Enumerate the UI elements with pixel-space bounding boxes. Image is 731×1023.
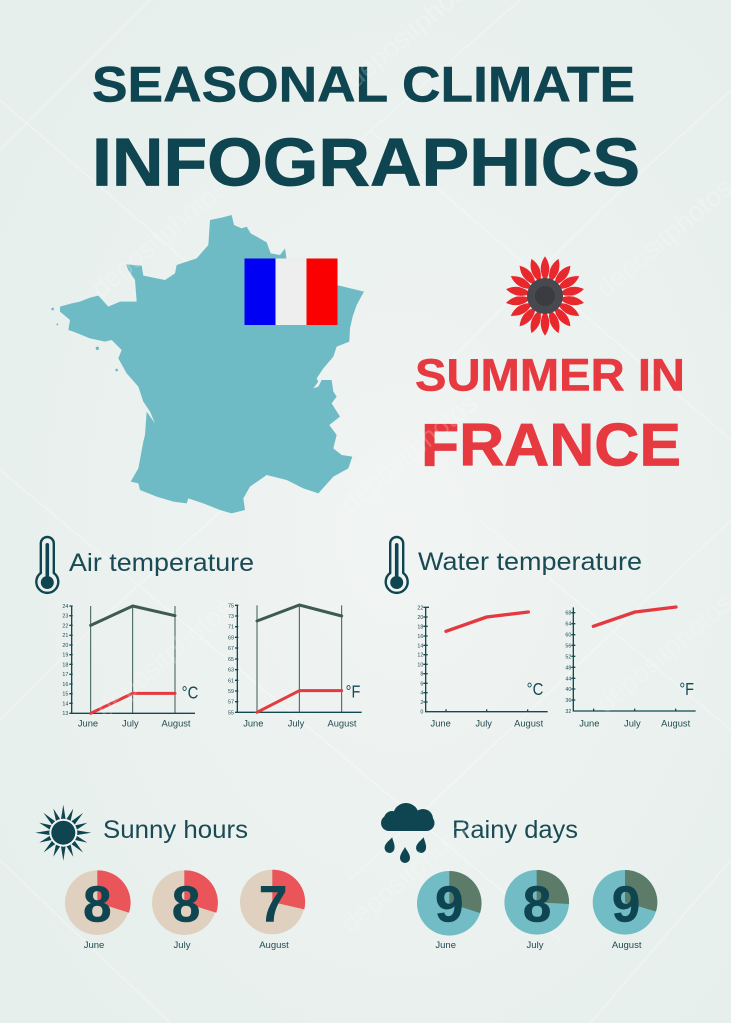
chart: air temperature Celsius: 22: [62, 623, 68, 629]
pie: rainy days July: [504, 870, 569, 951]
map of France: [51, 215, 364, 513]
chart: water temperature Celsius: 2: [420, 700, 423, 706]
icon: sunflower: [505, 256, 585, 336]
chart: air temperature Celsius: 20: [62, 643, 68, 649]
chart: air temperature Fahrenheit: 71: [228, 625, 234, 631]
chart: water temperature Celsius: 8: [420, 672, 423, 678]
watermark: depositphotos: [335, 388, 483, 519]
chart: water temperature Celsius: August: [514, 719, 544, 729]
chart: air temperature Celsius: 16: [62, 682, 68, 688]
icon: air thermometer: [36, 537, 58, 593]
chart: air temperature Celsius: 13: [62, 711, 68, 717]
chart: water temperature Celsius: [417, 605, 548, 729]
chart: air temperature Celsius: [62, 604, 198, 729]
pie: rainy days July: July: [527, 940, 544, 951]
chart: air temperature Celsius: 17: [62, 672, 68, 678]
pie: sunny hours August: [240, 870, 305, 951]
chart: air temperature Celsius: 15: [62, 692, 68, 698]
pie: rainy days June: [417, 871, 482, 951]
chart: water temperature Fahrenheit: 40: [565, 687, 571, 693]
chart: air temperature Fahrenheit: 73: [228, 614, 234, 620]
chart: air temperature Fahrenheit: [228, 603, 362, 729]
chart: water temperature Fahrenheit: 32: [565, 709, 571, 715]
chart: water temperature Celsius: July: [475, 719, 492, 729]
icon: water thermometer: [386, 537, 408, 593]
chart: water temperature Celsius: June: [431, 719, 451, 729]
watermark: depositphotos: [335, 808, 483, 939]
watermark: depositphotos: [85, 173, 233, 304]
pie: sunny hours July: July: [174, 940, 191, 951]
pie: rainy days June: June: [435, 940, 456, 951]
heading: sunny hours: Sunny hours: [103, 816, 248, 844]
chart: air temperature Fahrenheit: 69: [228, 635, 234, 641]
chart: water temperature Fahrenheit: °F: [679, 679, 694, 699]
chart: water temperature Fahrenheit: July: [624, 719, 641, 729]
chart: water temperature Celsius: 4: [420, 691, 423, 697]
chart: air temperature Fahrenheit: 63: [228, 668, 234, 674]
chart: water temperature Celsius: 6: [420, 681, 423, 687]
icon: rain cloud: [381, 803, 434, 863]
subtitle: summer in France: SUMMER IN: [415, 350, 685, 400]
title: INFOGRAPHICS: [92, 124, 640, 200]
pie: sunny hours August: 7: [259, 876, 287, 932]
chart: air temperature Fahrenheit: June: [243, 719, 263, 729]
chart: air temperature Celsius: 14: [62, 701, 68, 707]
chart: air temperature Fahrenheit: August: [327, 719, 357, 729]
chart: air temperature Fahrenheit: 57: [228, 700, 234, 706]
chart: air temperature Fahrenheit: 55: [228, 710, 234, 716]
chart: air temperature Fahrenheit: 65: [228, 657, 234, 663]
flag of France: [244, 258, 338, 325]
title: SEASONAL CLIMATE: [92, 56, 635, 112]
chart: water temperature Fahrenheit: 44: [565, 676, 571, 682]
chart: air temperature Fahrenheit: 67: [228, 646, 234, 652]
heading: air temperature: Air temperature: [69, 549, 254, 577]
pie: sunny hours July: 8: [172, 876, 200, 932]
subtitle: summer in France: [415, 350, 685, 478]
chart: water temperature Fahrenheit: 52: [565, 654, 571, 660]
chart: water temperature Fahrenheit: 68: [565, 611, 571, 617]
chart: air temperature Fahrenheit: °F: [346, 682, 360, 702]
chart: water temperature Fahrenheit: 60: [565, 633, 571, 639]
heading: water temperature: Water temperature: [418, 548, 642, 576]
pie: rainy days August: 9: [612, 876, 640, 932]
chart: water temperature Celsius: °C: [527, 679, 543, 699]
chart: water temperature Fahrenheit: 36: [565, 698, 571, 704]
chart: air temperature Fahrenheit: 59: [228, 689, 234, 695]
chart: air temperature Celsius: 23: [62, 614, 68, 620]
chart: air temperature Celsius: °C: [182, 682, 198, 702]
pie: sunny hours June: 8: [83, 876, 111, 932]
pie: rainy days August: August: [612, 940, 642, 951]
chart: water temperature Fahrenheit: 48: [565, 665, 571, 671]
chart: water temperature Fahrenheit: 64: [565, 622, 571, 628]
chart: water temperature Celsius: 12: [417, 653, 423, 659]
pie: rainy days August: [593, 870, 657, 951]
chart: air temperature Celsius: 21: [62, 633, 68, 639]
title: [92, 56, 640, 200]
chart: air temperature Celsius: 24: [62, 604, 68, 610]
chart: air temperature Celsius: 18: [62, 662, 68, 668]
watermark: depositphotos: [90, 593, 238, 724]
chart: water temperature Celsius: 10: [417, 662, 423, 668]
chart: air temperature Celsius: 19: [62, 653, 68, 659]
chart: water temperature Fahrenheit: August: [661, 719, 691, 729]
chart: air temperature Fahrenheit: July: [288, 719, 305, 729]
heading: rainy days: Rainy days: [452, 816, 578, 844]
chart: water temperature Fahrenheit: 56: [565, 643, 571, 649]
chart: air temperature Celsius: August: [161, 719, 191, 729]
pie: rainy days June: 9: [435, 876, 463, 932]
chart: air temperature Fahrenheit: 75: [228, 603, 234, 609]
chart: water temperature Celsius: 22: [417, 605, 423, 611]
chart: air temperature Celsius: June: [78, 719, 98, 729]
chart: water temperature Celsius: 16: [417, 634, 423, 640]
chart: water temperature Celsius: 18: [417, 624, 423, 630]
chart: air temperature Fahrenheit: 61: [228, 678, 234, 684]
chart: water temperature Celsius: 0: [420, 710, 423, 716]
icon: sun: [35, 805, 91, 861]
chart: water temperature Celsius: 20: [417, 615, 423, 621]
pie: sunny hours June: [65, 870, 131, 951]
chart: water temperature Celsius: 14: [417, 643, 423, 649]
subtitle: summer in France: FRANCE: [421, 412, 681, 478]
pie: sunny hours June: June: [84, 940, 104, 951]
pie: sunny hours July: [152, 870, 218, 951]
pie: sunny hours August: August: [259, 940, 289, 951]
chart: air temperature Celsius: July: [122, 719, 139, 729]
pie: rainy days July: 8: [523, 876, 551, 932]
chart: water temperature Fahrenheit: [565, 607, 696, 729]
chart: water temperature Fahrenheit: June: [579, 719, 599, 729]
